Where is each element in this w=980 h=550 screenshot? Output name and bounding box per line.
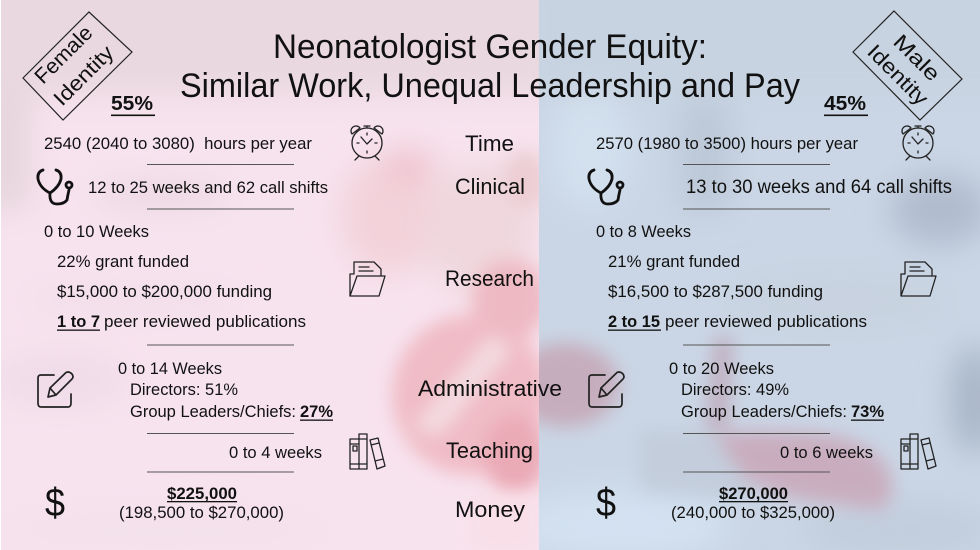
- female administrative text: Directors: 51%: [130, 380, 238, 399]
- stat: 45 percent: 45%: [824, 93, 866, 115]
- female research text: [44, 222, 306, 331]
- category labels: [418, 131, 562, 522]
- icon: female folder: [350, 262, 385, 296]
- male research text: 21% grant funded: [608, 252, 740, 271]
- male administrative text: Directors: 49%: [681, 380, 789, 399]
- female time text: 2540 (2040 to 3080) hours per year: [44, 134, 312, 153]
- icon: female pencil note: [38, 372, 73, 407]
- icon: male folder: [901, 262, 936, 296]
- category labels: Money: [455, 497, 525, 522]
- male administrative text: Group Leaders/Chiefs:: [681, 402, 847, 421]
- icon: male clock: [902, 126, 934, 160]
- female administrative text: Group Leaders/Chiefs:: [130, 402, 296, 421]
- badge: female identity: Female: [30, 21, 97, 89]
- badge: male identity: Identity: [862, 40, 933, 111]
- male research text: $16,500 to $287,500 funding: [608, 282, 823, 301]
- female money text: (198,500 to $270,000): [119, 503, 284, 522]
- male research text: 2 to 15: [608, 313, 660, 331]
- panel: blue male background: [510, 0, 980, 550]
- male teaching text: 0 to 6 weeks: [780, 443, 873, 462]
- female research text: peer reviewed publications: [104, 312, 306, 331]
- panel: pink female background: [0, 0, 570, 550]
- female administrative text: 0 to 14 Weeks: [118, 359, 222, 378]
- title: Similar Work, Unequal Leadership and Pay: [180, 67, 800, 105]
- male money text: (240,000 to $325,000): [671, 503, 835, 522]
- icon: male dollar: $: [596, 481, 616, 525]
- category labels: Clinical: [455, 174, 525, 199]
- title: Neonatologist Gender Equity:: [273, 28, 707, 66]
- female teaching text: 0 to 4 weeks: [229, 443, 322, 462]
- category labels: Administrative: [418, 376, 562, 401]
- female money text: $225,000: [167, 485, 237, 503]
- icon: female stethoscope: [38, 170, 72, 204]
- female clinical text: 12 to 25 weeks and 62 call shifts: [88, 178, 328, 197]
- male research text: [596, 222, 867, 331]
- icon: female clock: [351, 126, 383, 160]
- icon: male stethoscope: [589, 170, 623, 204]
- male research text: peer reviewed publications: [665, 312, 867, 331]
- category labels: Teaching: [446, 438, 533, 463]
- icon: male pencil note: [589, 372, 624, 407]
- icon: male books: [901, 434, 936, 469]
- stat: 55 percent: 55%: [111, 93, 153, 115]
- category labels: Research: [445, 266, 534, 291]
- badge: male identity: Male: [888, 30, 944, 86]
- female research text: $15,000 to $200,000 funding: [57, 282, 272, 301]
- badge: female identity: Identity: [49, 41, 119, 111]
- male time text: 2570 (1980 to 3500) hours per year: [596, 134, 858, 153]
- male research text: 0 to 8 Weeks: [596, 222, 691, 241]
- icon: female dollar: $: [45, 481, 65, 525]
- title: [180, 28, 800, 105]
- male administrative text: [669, 359, 884, 421]
- male administrative text: 0 to 20 Weeks: [669, 359, 774, 378]
- female research text: 22% grant funded: [57, 252, 189, 271]
- female administrative text: 27%: [300, 403, 333, 421]
- badge: male identity: [853, 11, 962, 120]
- badge: female identity: [23, 12, 132, 120]
- icon: female books: [350, 434, 385, 469]
- female research text: 0 to 10 Weeks: [44, 222, 149, 241]
- male money text: $270,000: [719, 485, 788, 503]
- female research text: 1 to 7: [57, 313, 100, 331]
- male clinical text: 13 to 30 weeks and 64 call shifts: [686, 177, 952, 198]
- female administrative text: [118, 359, 333, 421]
- male money text: [671, 485, 835, 522]
- female money text: [119, 485, 284, 522]
- category labels: Time: [465, 131, 514, 156]
- male administrative text: 73%: [851, 403, 884, 421]
